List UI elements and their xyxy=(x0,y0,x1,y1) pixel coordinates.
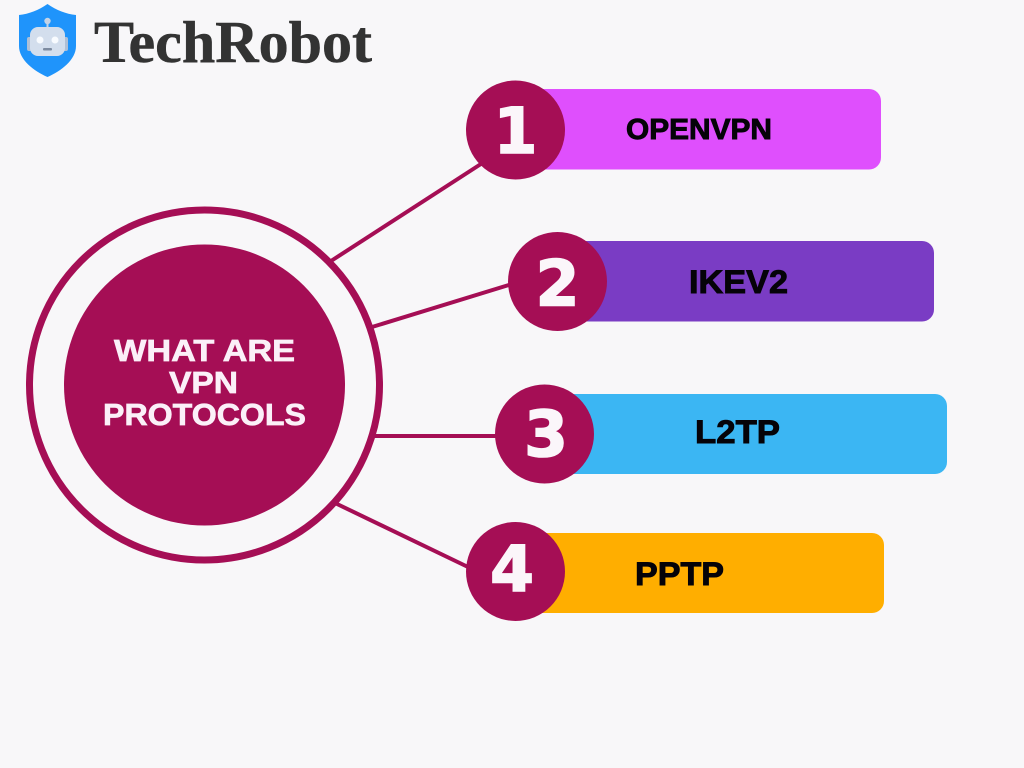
hub heading: PROTOCOLS xyxy=(103,397,306,432)
number badge 4 xyxy=(466,522,565,621)
connector lines xyxy=(331,162,512,567)
number badge 2 xyxy=(508,232,607,331)
hub heading xyxy=(103,333,306,432)
bar 2 xyxy=(573,241,934,322)
bar 4 xyxy=(530,533,884,613)
item 4: PPTP xyxy=(466,522,884,621)
number 4: 4 xyxy=(490,533,534,606)
number badge 3 xyxy=(495,384,594,484)
number badge 1 xyxy=(466,80,565,180)
logo wordmark: TechRobot xyxy=(94,9,372,75)
item 3: L2TP xyxy=(495,384,947,484)
bar 1 xyxy=(530,89,881,170)
hub inner disc xyxy=(64,244,345,526)
hub heading: VPN xyxy=(169,365,238,400)
central hub xyxy=(30,210,380,560)
label IKEv2: IKEV2 xyxy=(689,264,788,300)
bar 3 xyxy=(560,394,947,474)
icon: robot shield xyxy=(19,4,76,77)
number 3: 3 xyxy=(524,398,568,471)
logo: TechRobot xyxy=(19,4,372,77)
hub outer ring xyxy=(30,210,380,560)
label L2TP: L2TP xyxy=(695,414,780,450)
number 1: 1 xyxy=(494,95,537,168)
hub heading: WHAT ARE xyxy=(114,333,295,368)
label PPTP: PPTP xyxy=(635,556,724,592)
label OpenVPN: OPENVPN xyxy=(626,114,772,146)
item 1: OpenVPN xyxy=(466,80,881,180)
number 2: 2 xyxy=(536,248,579,320)
item 2: IKEv2 xyxy=(508,232,934,331)
